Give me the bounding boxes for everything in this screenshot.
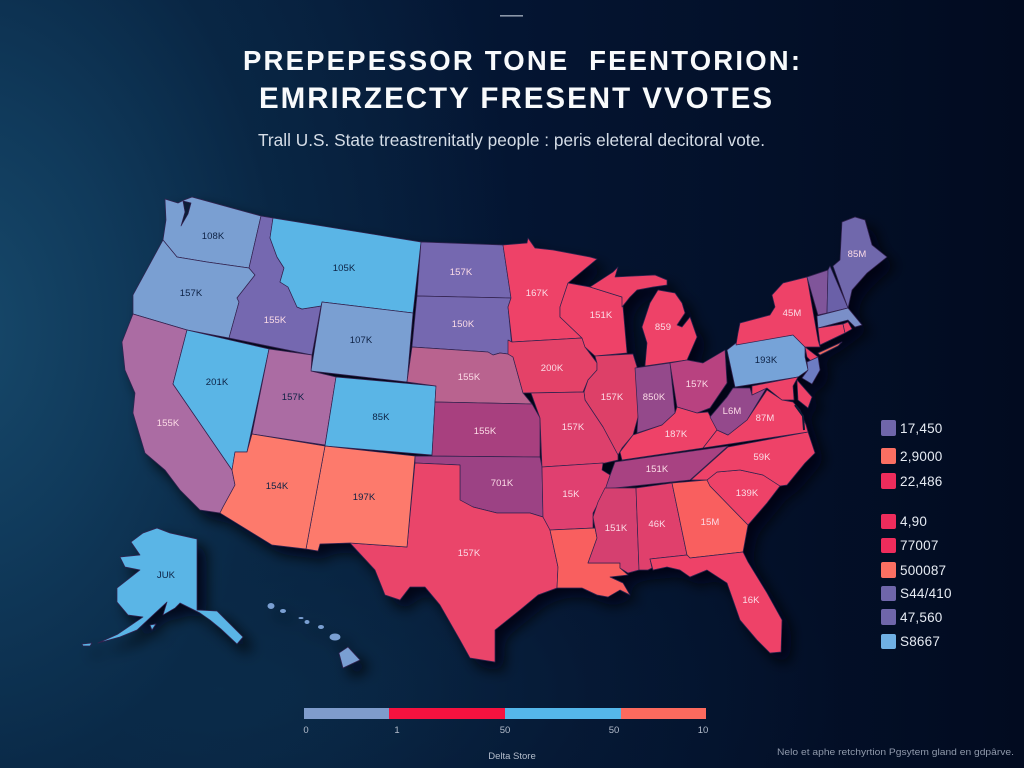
footer note: Nelo et aphe retchyrtion Pgsytem gland en gdpârve.	[777, 747, 1014, 757]
scale bar	[303, 708, 708, 762]
state: California	[122, 314, 235, 513]
state: Illinois	[584, 354, 638, 455]
state: Virginia: 87M	[756, 413, 774, 424]
state: Florida: 16K	[742, 595, 760, 606]
state: Arkansas	[542, 463, 610, 530]
state: Montana	[270, 218, 421, 313]
state: Pennsylvania	[727, 335, 808, 387]
legend item 4	[881, 514, 927, 529]
state: Oregon	[133, 240, 255, 338]
legend item 2: 2,9000	[900, 449, 942, 464]
state: Colorado	[325, 377, 436, 455]
scale bar: 1	[394, 725, 400, 736]
state: North Carolina	[691, 432, 815, 486]
state: West Virginia	[710, 387, 767, 435]
legend item 3	[881, 473, 942, 489]
state: Nebraska: 155K	[458, 372, 481, 383]
state: Kentucky: 187K	[665, 429, 688, 440]
title: EMRIRZECTY FRESENT VVOTES	[259, 82, 772, 115]
state: Mississippi	[588, 488, 639, 573]
state: Nebraska	[407, 347, 532, 404]
state: Kentucky	[620, 407, 717, 460]
state: Louisiana	[550, 528, 630, 597]
state: Vermont	[807, 270, 828, 315]
state: Florida	[650, 552, 782, 653]
state: New York	[736, 277, 820, 347]
state: Minnesota	[503, 238, 597, 342]
legend item 8	[881, 609, 942, 625]
state: North Carolina: 59K	[753, 452, 771, 463]
state: Kansas	[432, 402, 540, 457]
state: Michigan: 859	[655, 322, 671, 333]
legend item 1: 17,450	[900, 421, 942, 436]
state: Arizona	[220, 434, 325, 549]
title: PREPEPESSOR TONE FEENTORION:	[243, 45, 800, 76]
state: West Virginia: L6M	[723, 406, 741, 417]
state: California: 155K	[157, 418, 180, 429]
state: New York: 45M	[783, 308, 801, 319]
state: Oklahoma	[415, 456, 543, 517]
legend item 8: 47,560	[900, 610, 942, 625]
state: Nevada	[173, 330, 269, 470]
title	[243, 45, 800, 115]
state: Missouri	[531, 392, 618, 467]
state: Wisconsin and Upper Michigan: 151K	[590, 310, 613, 321]
top dash ornament	[500, 15, 523, 17]
state: Connecticut and Rhode Island	[818, 322, 852, 345]
state: Alaska: JUK	[157, 570, 176, 581]
state: Texas	[350, 463, 558, 662]
state: South Dakota	[412, 296, 513, 357]
state: Idaho	[229, 216, 321, 355]
state: Maine: 85M	[848, 249, 866, 260]
state: Oregon: 157K	[180, 288, 203, 299]
legend item 3: 22,486	[900, 474, 942, 489]
legend item 9: S8667	[900, 634, 940, 649]
state: Alaska	[82, 528, 243, 646]
state: North Dakota: 157K	[450, 267, 473, 278]
state: Alabama: 46K	[648, 519, 666, 530]
US map	[82, 197, 887, 668]
state: Tennessee: 151K	[646, 464, 669, 475]
state: Wyoming	[311, 302, 413, 382]
state: Hawaii	[268, 603, 360, 668]
state: South Dakota: 150K	[452, 319, 475, 330]
scale bar: 10	[698, 725, 708, 736]
state: South Carolina	[707, 470, 780, 525]
state: Kansas: 155K	[474, 426, 497, 437]
state: North Dakota	[417, 242, 511, 298]
legend item 5	[881, 538, 939, 553]
state: Utah: 157K	[282, 392, 305, 403]
state: Long Island	[818, 342, 842, 355]
state: New Jersey	[802, 347, 820, 384]
state: Iowa	[508, 338, 597, 393]
state: Indiana: 850K	[643, 392, 666, 403]
state: Alabama	[636, 483, 687, 570]
state: Minnesota: 167K	[526, 288, 549, 299]
state: Tennessee	[605, 446, 728, 489]
legend item 1	[881, 420, 942, 436]
state: Mississippi: 151K	[605, 523, 628, 534]
state: Texas: 157K	[458, 548, 481, 559]
state: Oklahoma: 701K	[491, 478, 514, 489]
state: Maryland and Delaware	[752, 377, 812, 408]
state: Washington: 108K	[202, 231, 225, 242]
state: Ohio: 157K	[686, 379, 709, 390]
legend	[881, 420, 952, 649]
scale bar: 0	[303, 725, 309, 736]
state: Pennsylvania: 193K	[755, 355, 778, 366]
legend item 9	[881, 634, 940, 649]
state: Virginia	[703, 390, 808, 448]
state: Washington	[163, 197, 261, 268]
state: Nevada: 201K	[206, 377, 229, 388]
state: Missouri: 157K	[562, 422, 585, 433]
state: Idaho: 155K	[264, 315, 287, 326]
state: Michigan	[642, 290, 697, 366]
state: Iowa: 200K	[541, 363, 564, 374]
legend item 4: 4,90	[900, 514, 927, 529]
state: Wisconsin and Upper Michigan	[560, 267, 667, 356]
state: Colorado: 85K	[372, 412, 390, 423]
legend item 7: S44/410	[900, 586, 952, 601]
state: Arkansas: 15K	[562, 489, 580, 500]
scale bar: 50	[500, 725, 510, 736]
state: Illinois: 157K	[601, 392, 624, 403]
state: Ohio	[670, 350, 727, 413]
legend item 6: 500087	[900, 563, 946, 578]
state: Georgia	[672, 480, 748, 558]
state: South Carolina: 139K	[736, 488, 759, 499]
legend item 2	[881, 448, 942, 464]
state: Montana: 105K	[333, 263, 356, 274]
state: New Mexico	[306, 446, 415, 551]
state: Maine	[833, 217, 887, 308]
state: Wyoming: 107K	[350, 335, 373, 346]
subtitle: Trall U.S. State treastrenitatly people : peris eleteral decitoral vote.	[258, 130, 765, 150]
scale bar: Delta Store	[488, 751, 536, 762]
legend item 5: 77007	[900, 538, 939, 553]
state: Utah	[252, 349, 336, 445]
state: Arizona: 154K	[266, 481, 289, 492]
state: Indiana	[635, 363, 675, 433]
state: New Mexico: 197K	[353, 492, 376, 503]
legend item 6	[881, 562, 946, 578]
state: New Hampshire	[827, 266, 848, 313]
scale bar: 50	[609, 725, 619, 736]
state: Massachusetts	[817, 308, 862, 328]
state: Georgia: 15M	[701, 517, 719, 528]
